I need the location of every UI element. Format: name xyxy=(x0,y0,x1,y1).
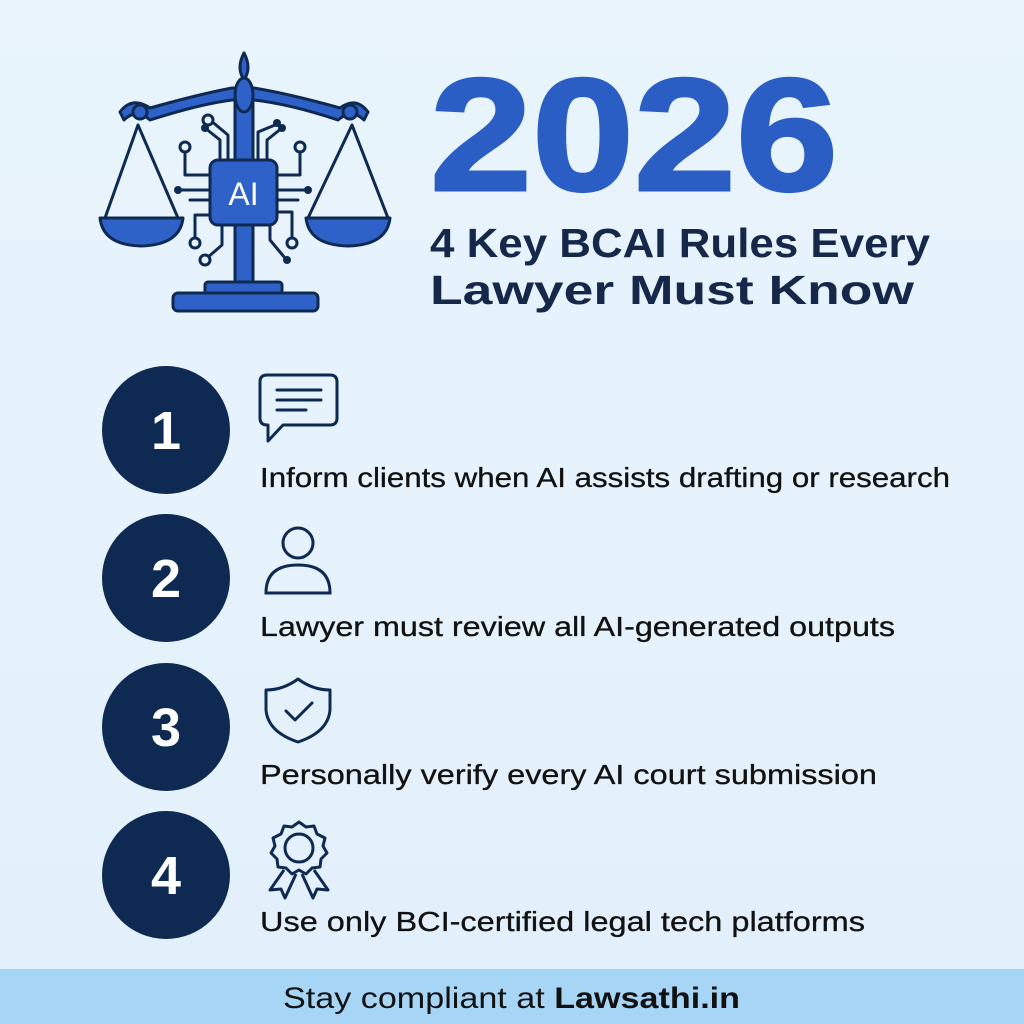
rule 3 xyxy=(102,663,877,791)
rule 4 xyxy=(102,811,865,939)
rule 2 xyxy=(102,514,895,642)
subtitle xyxy=(430,220,930,313)
rule 1: Inform clients when AI assists drafting or research xyxy=(260,462,950,493)
rule 4: 4 xyxy=(151,846,181,906)
rule 2: Lawyer must review all AI-generated outputs xyxy=(260,611,895,642)
subtitle: 4 Key BCAI Rules Every xyxy=(430,220,930,266)
rule 4: Use only BCI-certified legal tech platforms xyxy=(260,906,865,937)
icon: shield xyxy=(266,679,330,742)
title: 2026: 2026 xyxy=(430,45,838,224)
rule 3: 3 xyxy=(151,698,181,758)
icon: person xyxy=(266,528,330,593)
rule 1 xyxy=(102,366,950,494)
icon: scales of justice with AI chip xyxy=(100,53,390,311)
subtitle: Lawyer Must Know xyxy=(430,267,914,313)
rule 3: Personally verify every AI court submission xyxy=(260,759,877,790)
rule 1: 1 xyxy=(151,401,181,461)
footer banner xyxy=(0,969,1024,1024)
rule 2: 2 xyxy=(151,549,181,609)
footer banner: Stay compliant at Lawsathi.in xyxy=(283,982,740,1015)
icon: chat bubble xyxy=(260,375,337,441)
icon: award rosette xyxy=(270,822,328,898)
icon: scales of justice with AI chip: AI xyxy=(228,176,259,212)
